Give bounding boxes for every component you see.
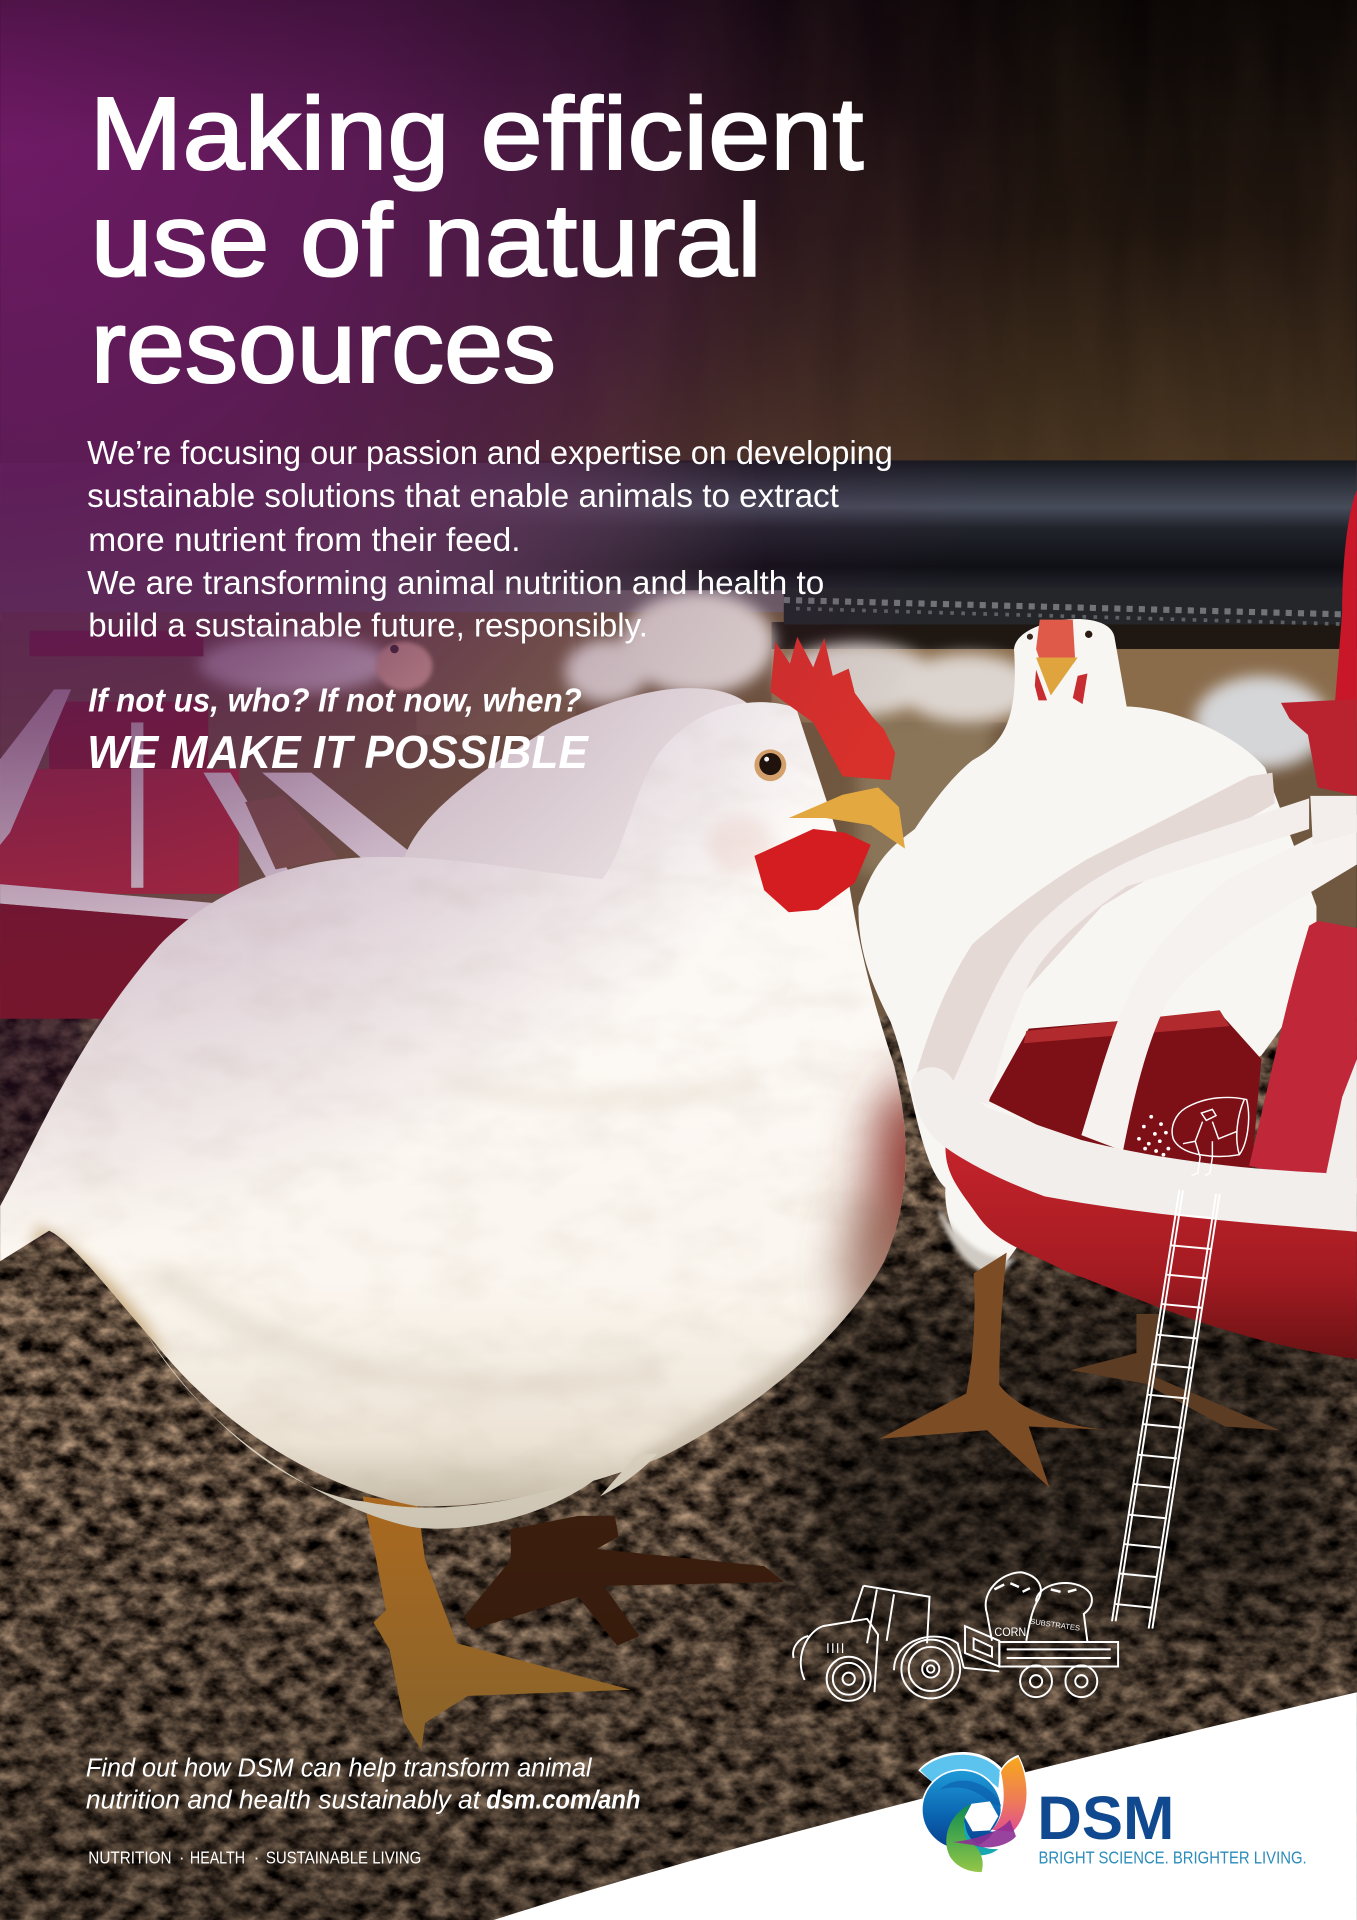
rear hen beak [1036,658,1078,696]
main hen far leg [464,1516,784,1646]
title: Making efficient [90,76,863,191]
strapline: · [179,1848,185,1868]
body text: We are transforming animal nutrition and health to [87,565,824,602]
top shade [0,0,1357,147]
body text: sustainable solutions that enable animals to extract [87,478,839,515]
red nipple drinker column [1281,490,1357,796]
tagline: we make it possible: WE MAKE IT POSSIBLE [87,726,590,778]
DSM slogan: BRIGHT SCIENCE. BRIGHTER LIVING. [1038,1848,1307,1868]
title: resources [91,289,556,404]
call to action: dsm.com/anh [486,1787,641,1815]
distant hens [198,591,1329,769]
rear hen plumage [858,619,1316,1273]
rear hen wattles [1035,670,1087,704]
rear hen comb and face [1036,620,1075,676]
strapline: HEALTH [190,1848,245,1868]
main hen [0,637,952,1750]
feeder central cone [1249,921,1357,1194]
feeder rim [911,1067,1357,1232]
DSM logo symbol [918,1752,1028,1872]
title: use of natural [91,183,762,298]
tagline question: If not us, who? If not now, when? [88,682,582,719]
feeder bowl [945,1147,1357,1359]
illustration: trailer with sacks [965,1572,1118,1697]
beak [789,787,905,849]
feeder arched bars [915,773,1357,1194]
main hen near leg [363,1496,631,1750]
main hen plumage [0,702,906,1506]
bottom darkening overlay [0,1445,1357,1920]
body text: build a sustainable future, responsibly. [88,608,648,645]
sack labels: SUBSTRATES [1030,1617,1081,1633]
title [90,76,863,404]
strapline: · [254,1848,259,1868]
sack labels: CORN [994,1625,1026,1639]
body text [87,435,893,645]
rear hen at right [858,619,1316,1488]
call to action: nutrition and health sustainably at [86,1787,482,1815]
illustration: ladder [1112,1190,1220,1629]
left background hen body [404,688,765,888]
illustration: man emptying bag [1139,1097,1249,1176]
body text: We’re focusing our passion and expertise on developing [87,435,893,472]
white swoosh corner [494,1692,1357,1920]
right feeder [911,773,1357,1359]
DSM wordmark: DSM [1037,1784,1174,1852]
feeder tray interior [988,1013,1261,1169]
call to action [86,1755,641,1815]
plumage shading [24,743,906,1462]
feed pipe [367,460,1357,624]
tail feather [147,1335,600,1529]
sack labels [994,1617,1081,1639]
comb [770,637,895,780]
eye [754,749,786,781]
illustration: tractor [793,1586,999,1701]
body text: more nutrient from their feed. [88,522,521,559]
mid-ground background behind hens [0,463,1357,1016]
litter floor [0,980,1357,1920]
background hen head on left [376,642,432,691]
call to action: Find out how DSM can help transform animal [86,1755,593,1783]
strapline: SUSTAINABLE LIVING [266,1848,421,1868]
wattle [754,829,871,912]
purple brand gradient overlay [0,0,1357,1298]
rear hen legs [879,1253,1280,1488]
wooden wall background [0,0,1357,465]
background left feeder [0,631,416,1019]
strapline [88,1848,421,1868]
strapline: NUTRITION [88,1848,172,1868]
